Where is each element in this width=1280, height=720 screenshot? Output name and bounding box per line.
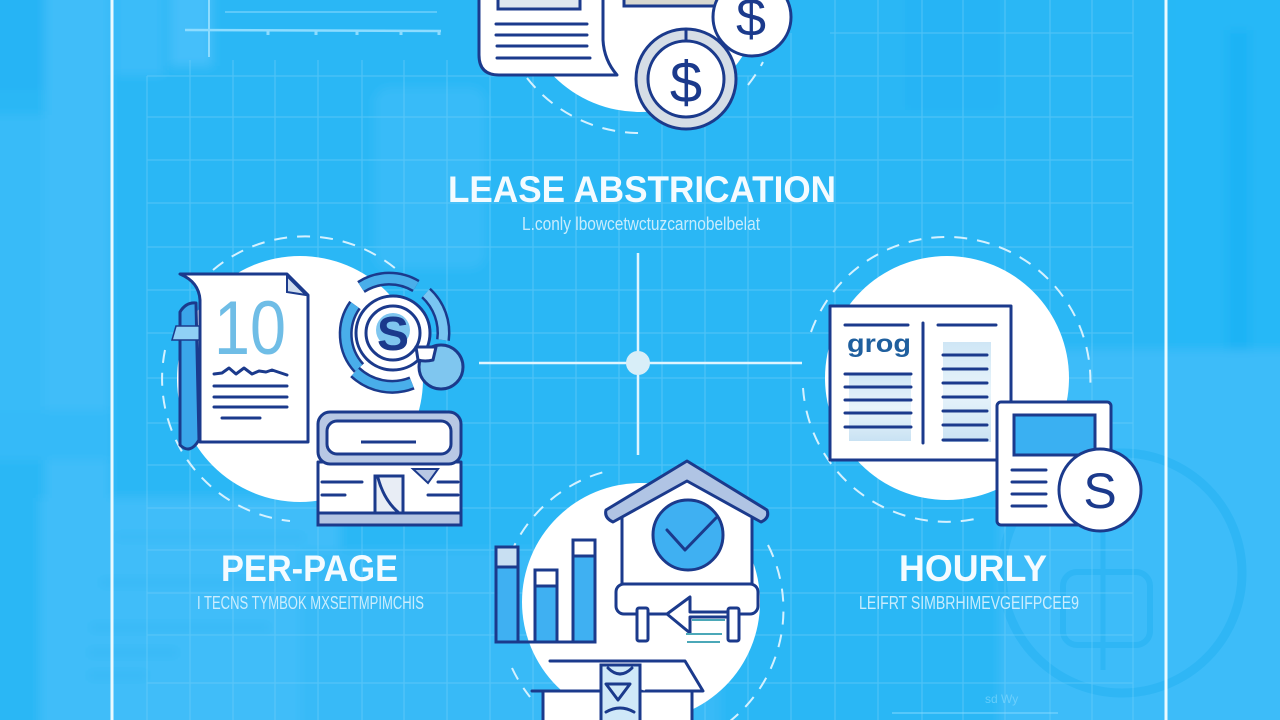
panel: property package (495, 461, 783, 720)
icon circle: property (510, 470, 783, 720)
icon: lease document (479, 0, 717, 75)
icon circle: hourly (803, 237, 1090, 522)
icon: timesheet document: grog (847, 330, 911, 358)
faint axis chart (185, 0, 441, 57)
icon: house with checkmark (606, 461, 768, 642)
icon: invoice (997, 402, 1111, 525)
icon: storefront box (318, 412, 461, 525)
icon: large coin: $ (670, 50, 702, 115)
caption: lease abstraction: L.conly lbowcetwctuzcarnobelbelat (522, 214, 760, 234)
icon: hourly coin: S (1083, 463, 1117, 519)
icon: refresh coin: S (377, 308, 409, 361)
icon circle: lease (518, 0, 763, 133)
icon: bar chart (495, 540, 596, 642)
panel: lease abstraction (448, 0, 836, 234)
icon: priced page: 10 (214, 286, 286, 371)
icon circle: per-page (162, 236, 423, 521)
icon: hourly coin (1059, 449, 1141, 531)
blueprint grid (147, 0, 1133, 720)
heading: hourly: HOURLY (899, 548, 1047, 589)
panel: hourly (803, 237, 1141, 613)
icon: refresh coin (346, 279, 463, 389)
icon: large coin (636, 29, 736, 129)
heading: lease abstraction: LEASE ABSTRICATION (448, 169, 836, 210)
icon: priced page (180, 274, 308, 442)
icon: small coin (713, 0, 791, 56)
heading: per-page: PER-PAGE (221, 548, 398, 589)
icon: timesheet document (830, 306, 1011, 460)
icon: pen (172, 303, 200, 449)
center connector cross (479, 253, 802, 455)
panel: per-page (162, 236, 463, 613)
faint background label: sd Wy (985, 692, 1018, 706)
icon: open box (532, 661, 703, 720)
caption: hourly: LEIFRT SIMBRHIMEVGEIFPCEE9 (859, 593, 1079, 613)
background dollar emblem (1002, 453, 1242, 693)
caption: per-page: I TECNS TYMBOK MXSEITMPIMCHIS (197, 593, 424, 613)
